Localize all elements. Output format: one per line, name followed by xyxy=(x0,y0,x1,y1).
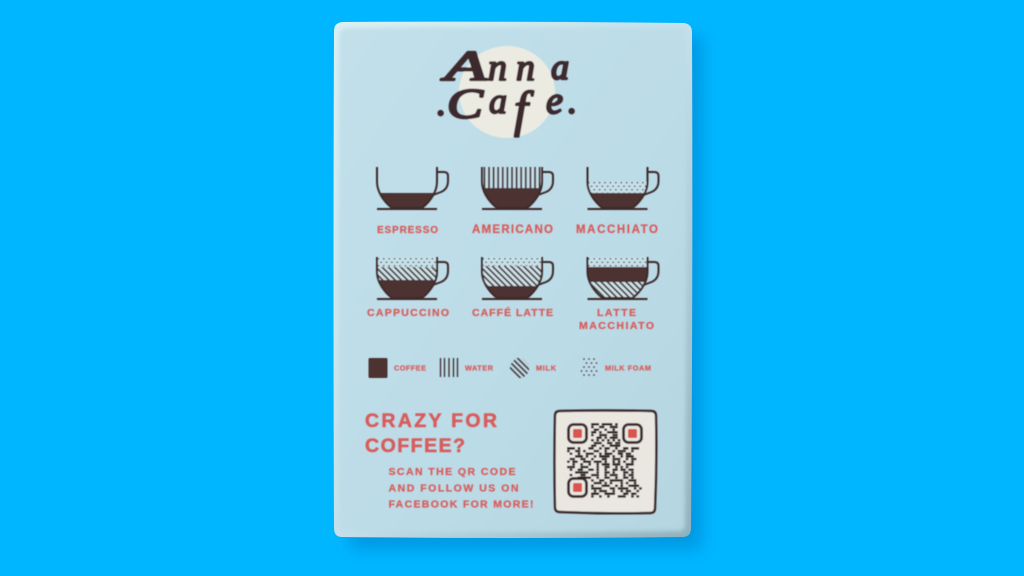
cup: cappuccino xyxy=(377,257,448,299)
card shadow xyxy=(345,36,702,549)
label: latte macchiato: MACCHIATO xyxy=(579,320,654,332)
cup: caffe latte xyxy=(482,257,553,299)
cup: macchiato xyxy=(588,167,658,209)
cups grid xyxy=(377,167,658,299)
label: espresso: ESPRESSO xyxy=(377,225,438,236)
logo wordmark line 1 continued: n xyxy=(516,47,535,89)
QR frame xyxy=(554,410,656,513)
legend: milk label: MILK xyxy=(536,364,557,372)
QR finder bottom-left xyxy=(568,478,586,496)
legend: milk swatch xyxy=(510,358,529,378)
legend: coffee swatch xyxy=(368,358,388,378)
call to action text: FACEBOOK FOR MORE! xyxy=(388,498,534,510)
legend: coffee label: COFFEE xyxy=(394,364,426,372)
logo wordmark line 1 continued: a xyxy=(551,47,569,87)
cup labels xyxy=(367,224,658,332)
logo letter C: C xyxy=(447,82,484,128)
logo wordmark line 2: . xyxy=(568,81,577,121)
logo wordmark line 1 continued: n xyxy=(488,47,507,89)
heading: crazy for coffee: CRAZY FOR xyxy=(365,410,497,432)
QR code xyxy=(554,410,656,513)
call to action text: SCAN THE QR CODE xyxy=(388,466,516,478)
call to action text: AND FOLLOW US ON xyxy=(388,482,518,494)
QR finder top-right xyxy=(624,424,642,442)
label: latte macchiato: LATTE xyxy=(597,307,636,319)
legend: milk foam label: MILK FOAM xyxy=(605,364,651,372)
logo wordmark line 1: A xyxy=(440,44,488,90)
legend xyxy=(368,358,651,378)
label: caffe latte: CAFFÉ LATTE xyxy=(472,306,553,319)
legend: water swatch xyxy=(440,358,458,377)
cup: americano xyxy=(482,167,553,209)
cup: espresso xyxy=(377,167,448,209)
label: macchiato: MACCHIATO xyxy=(576,224,658,236)
logo: Anna Cafe xyxy=(437,44,577,138)
poster card xyxy=(334,22,692,538)
logo wordmark line 2: e xyxy=(546,80,563,122)
QR data modules xyxy=(567,424,642,496)
QR finder top-left xyxy=(568,424,586,442)
label: americano: AMERICANO xyxy=(472,224,553,236)
logo wordmark line 2: . xyxy=(437,83,446,123)
logo circle xyxy=(459,46,555,138)
cup: latte macchiato xyxy=(588,257,658,299)
label: cappuccino: CAPPUCCINO xyxy=(367,307,449,319)
legend: milk foam swatch xyxy=(581,358,597,376)
logo wordmark line 2: a xyxy=(489,81,507,121)
heading: crazy for coffee: COFFEE? xyxy=(365,435,465,457)
logo wordmark line 2: f xyxy=(514,81,534,137)
legend: water label: WATER xyxy=(465,364,494,372)
